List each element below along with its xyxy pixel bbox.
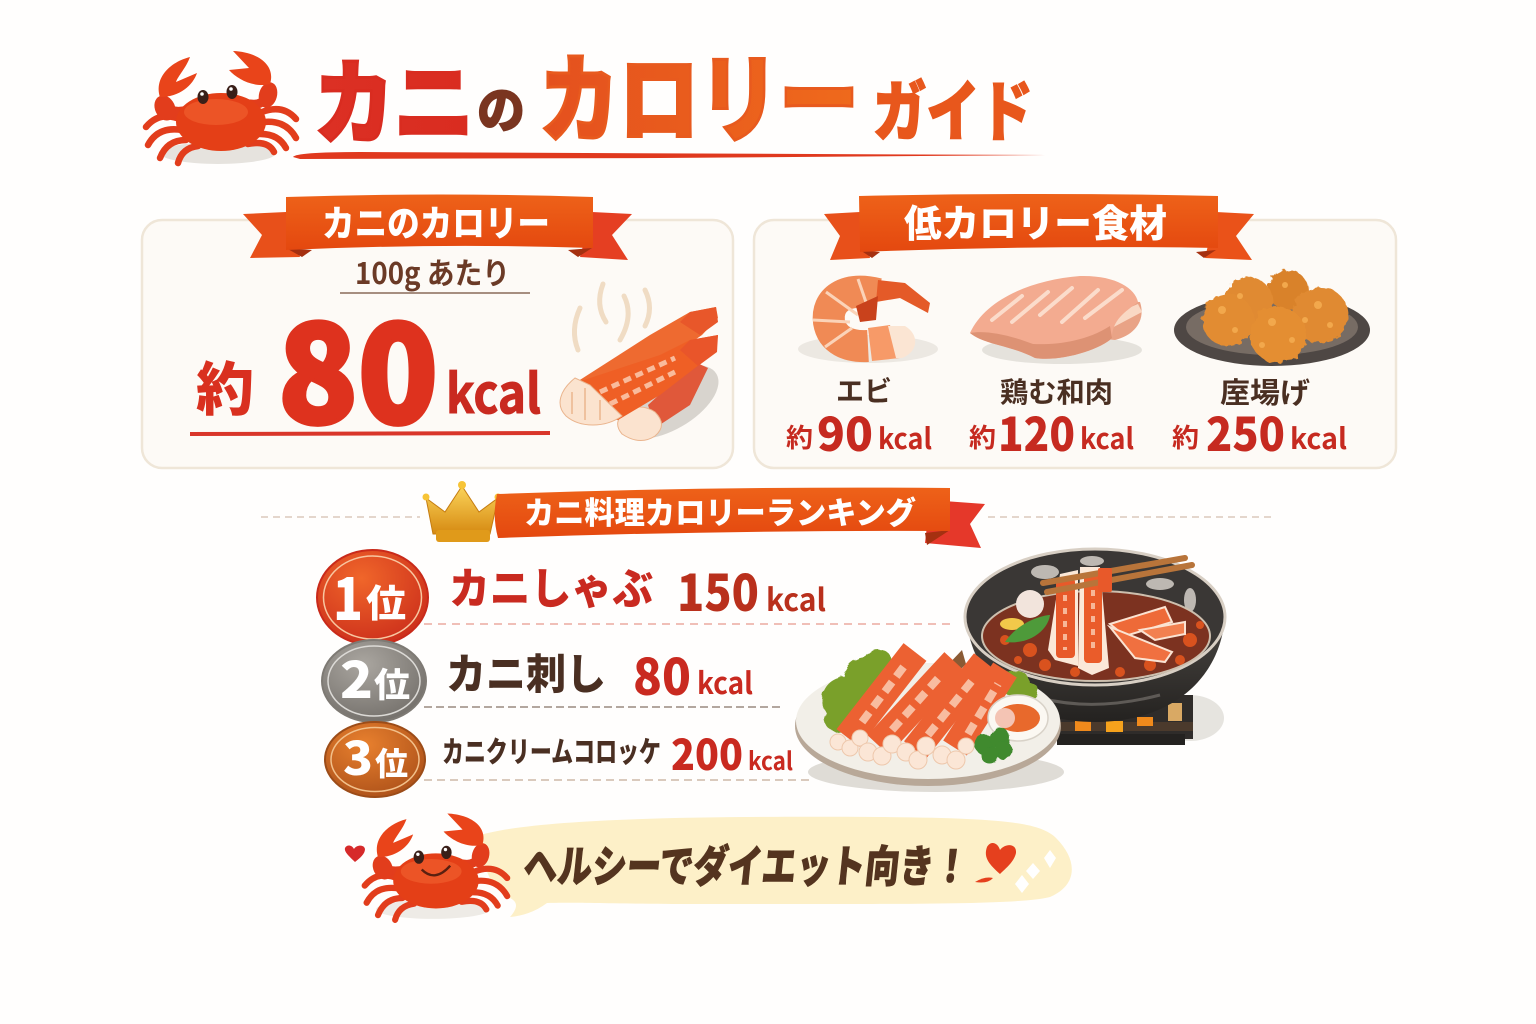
big value: 80 kcal: 80 (278, 268, 438, 462)
icon: steam (574, 284, 650, 350)
panel: low calorie foods (754, 193, 1396, 468)
ranking row 2: カニ刺し (446, 641, 606, 702)
badge: 2nd (322, 640, 426, 722)
food: shrimp (798, 279, 938, 363)
food calorie values: kcal (1290, 416, 1347, 458)
food calorie values: 約 (969, 418, 996, 455)
food names: 鶏む和肉 (1000, 371, 1113, 411)
ribbon heading: ranking: カニ料理カロリーランキング (524, 488, 916, 533)
per 100g label: 100g あたり (355, 249, 510, 293)
food calorie values: kcal (878, 416, 932, 458)
title (314, 23, 1033, 163)
icon: small heart (345, 845, 365, 862)
ranking row 2: kcal (697, 659, 753, 703)
hot pot bowl (965, 549, 1225, 722)
ribbon heading: crab calories: カニのカロリー (322, 195, 550, 247)
food calorie values: 約 (1172, 418, 1199, 455)
ranking row 1: kcal (766, 575, 826, 620)
title: カロリー (539, 23, 859, 162)
ribbon heading: crab calories (243, 194, 632, 260)
food calorie values: 90 (817, 399, 873, 465)
ranking row 3: kcal (748, 742, 793, 778)
ribbon heading: low calorie foods (824, 193, 1254, 260)
plate of crab legs (795, 649, 1064, 792)
big value: 80 kcal: 約 (196, 343, 254, 427)
title: カニ (314, 30, 474, 163)
icon: crown (422, 481, 502, 542)
ranking row 1: カニしゃぶ (449, 555, 653, 617)
big value: 80 kcal: kcal (446, 350, 541, 429)
icon: sparkles (1015, 850, 1056, 893)
ranking row 3: カニクリームコロッケ (442, 729, 661, 771)
ranking row 2: 80 (633, 638, 691, 710)
ranking row 3: 200 (671, 722, 743, 783)
badge: 3rd: 位 (375, 739, 408, 785)
food calorie values: 120 (998, 399, 1075, 465)
badge: 1st (317, 550, 428, 645)
title: の (477, 71, 525, 143)
badge: 3rd: 3 (343, 723, 373, 789)
food: fried chicken (1174, 270, 1370, 366)
badge: 1st: 位 (366, 573, 406, 628)
ranking row 3 (325, 722, 812, 797)
badge: 3rd (325, 722, 425, 797)
food names (836, 370, 1310, 412)
food calorie values: kcal (1080, 416, 1134, 458)
title underline (293, 152, 1046, 159)
panel: crab calories (142, 194, 733, 468)
food calorie values (786, 399, 1347, 465)
food calorie values: 約 (786, 418, 813, 455)
icon: heart (975, 843, 1016, 882)
food: chicken breast (970, 276, 1142, 364)
illustration: crab hot pot (795, 549, 1225, 792)
food calorie values: 250 (1206, 399, 1285, 465)
food names: エビ (836, 370, 892, 410)
title: ガイド (873, 59, 1033, 155)
food names: 庢場げ (1220, 370, 1310, 412)
ribbon heading: ranking (495, 488, 985, 548)
callout text: ヘルシーでダイエット向き！ (521, 831, 972, 895)
ranking row 2 (322, 638, 780, 722)
hot pot stove (1057, 695, 1224, 745)
ranking row 1 (317, 550, 955, 645)
ranking row 1: 150 (677, 554, 759, 626)
badge: 2nd: 2 (340, 641, 373, 713)
badge: 1st: 1 (333, 553, 363, 637)
ribbon heading: low calorie foods: 低カロリー食材 (904, 193, 1167, 248)
icon: crab mascot (146, 51, 296, 164)
callout: speech bubble (480, 817, 1072, 917)
big value: 80 kcal (190, 268, 550, 462)
icon: crab legs (560, 307, 730, 454)
icon: happy crab (345, 813, 507, 920)
badge: 2nd: 位 (374, 658, 410, 707)
